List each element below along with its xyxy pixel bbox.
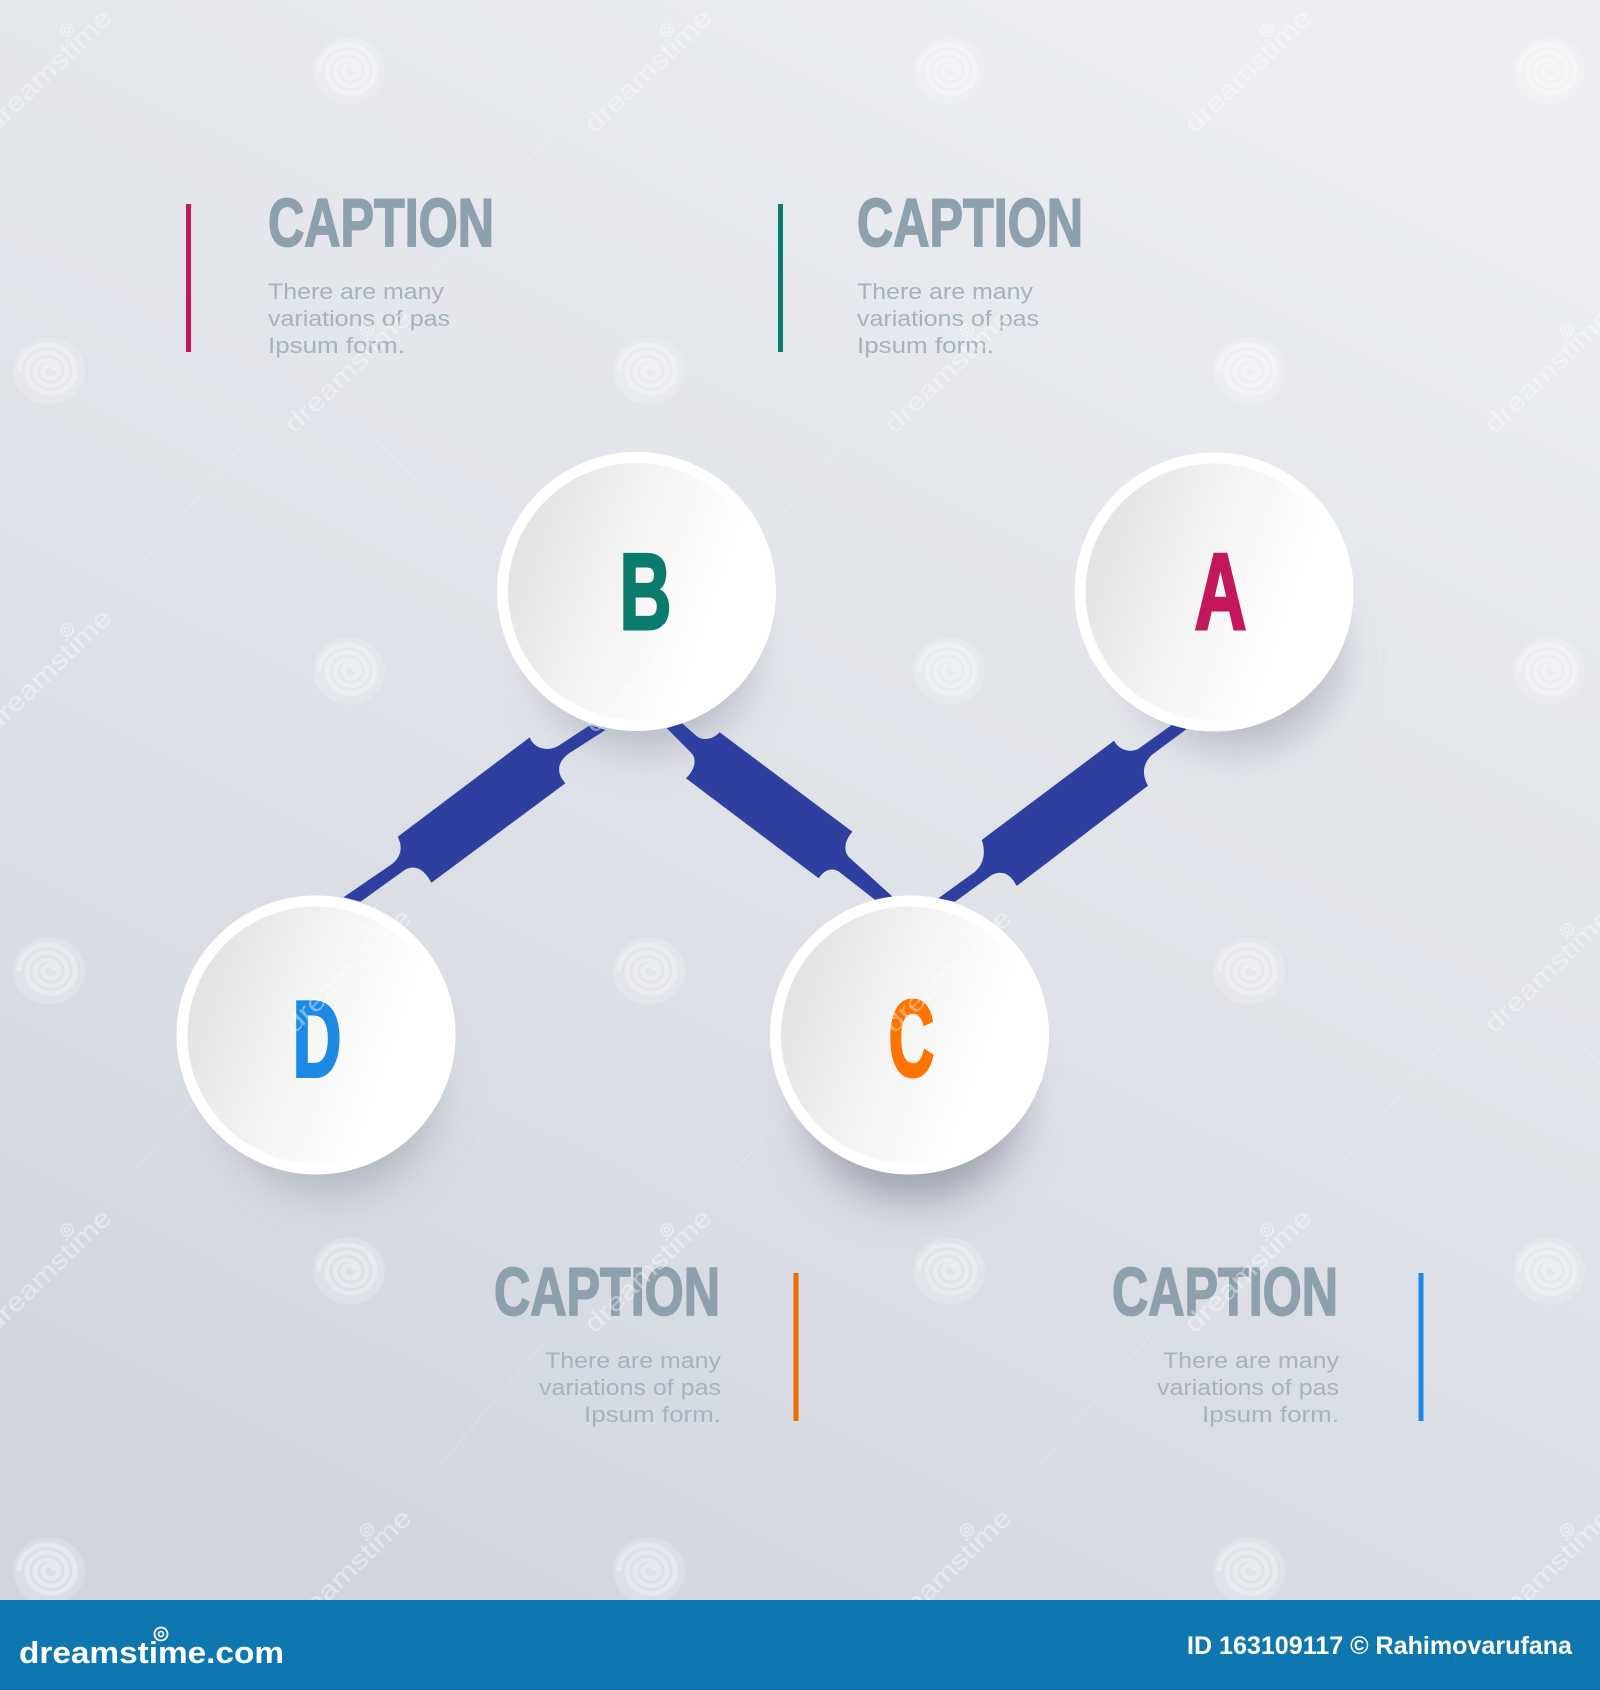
caption block A (top left): Ipsum form. [268,333,405,358]
caption block B (top middle) [778,185,1083,358]
watermark text: dreamstime [1478,902,1600,1039]
connector: B to C [667,723,893,900]
watermark text: dreamstime [878,902,1018,1039]
caption block B (top middle): There are many [857,279,1034,304]
footer banner [0,1600,1600,1690]
caption block C (bottom middle): Ipsum form. [584,1402,721,1427]
watermark text: dreamstime [278,302,418,439]
letter D: D [293,979,341,1101]
watermark text: dreamstime [278,902,418,1039]
caption block C (bottom middle): There are many [545,1348,722,1373]
connector: D to B [343,725,606,902]
footer credit: ID 163109117 © Rahimovarufana [1187,1632,1573,1660]
caption block D (bottom right): variations of pas [1157,1375,1339,1400]
circle shadows [226,556,1340,1200]
watermark text: dreamstime [278,1502,418,1639]
caption block B (top middle): CAPTION [857,185,1083,261]
caption block C (bottom middle): CAPTION [494,1254,720,1330]
caption block B (top middle): variations of pas [857,306,1039,331]
caption block D (bottom right): There are many [1163,1348,1340,1373]
connector: C to A [938,725,1187,902]
circle B [497,452,776,731]
caption block D (bottom right) [1112,1254,1424,1427]
watermark text: dreamstime [878,302,1018,439]
letter A: A [1195,530,1246,653]
caption block A (top left) [186,185,494,358]
letter B: B [620,530,671,653]
caption block C (bottom middle) [494,1254,798,1427]
watermark text: dreamstime [1178,2,1318,139]
caption block A (top left): variations of pas [268,306,450,331]
watermark text: dreamstime [1178,1202,1318,1339]
watermark text: dreamstime [578,2,718,139]
watermark text: dreamstime [1478,302,1600,439]
caption block A (top left): There are many [268,279,445,304]
caption block B (top middle): Ipsum form. [857,333,994,358]
letter C: C [889,977,934,1099]
watermark text: dreamstime [878,1502,1018,1639]
circle A [1074,452,1354,732]
watermark text: dreamstime [1178,602,1318,739]
caption block A (top left): CAPTION [268,185,494,261]
footer logo: dreamstime.com [19,1635,284,1670]
caption block C (bottom middle): variations of pas [539,1375,721,1400]
circle D [176,896,456,1174]
caption block D (bottom right): CAPTION [1112,1254,1338,1330]
caption block D (bottom right): Ipsum form. [1202,1402,1339,1427]
circle C [770,896,1049,1174]
watermark text: dreamstime [578,1202,718,1339]
watermark text: dreamstime [578,602,718,739]
watermark text: dreamstime [1478,1502,1600,1639]
